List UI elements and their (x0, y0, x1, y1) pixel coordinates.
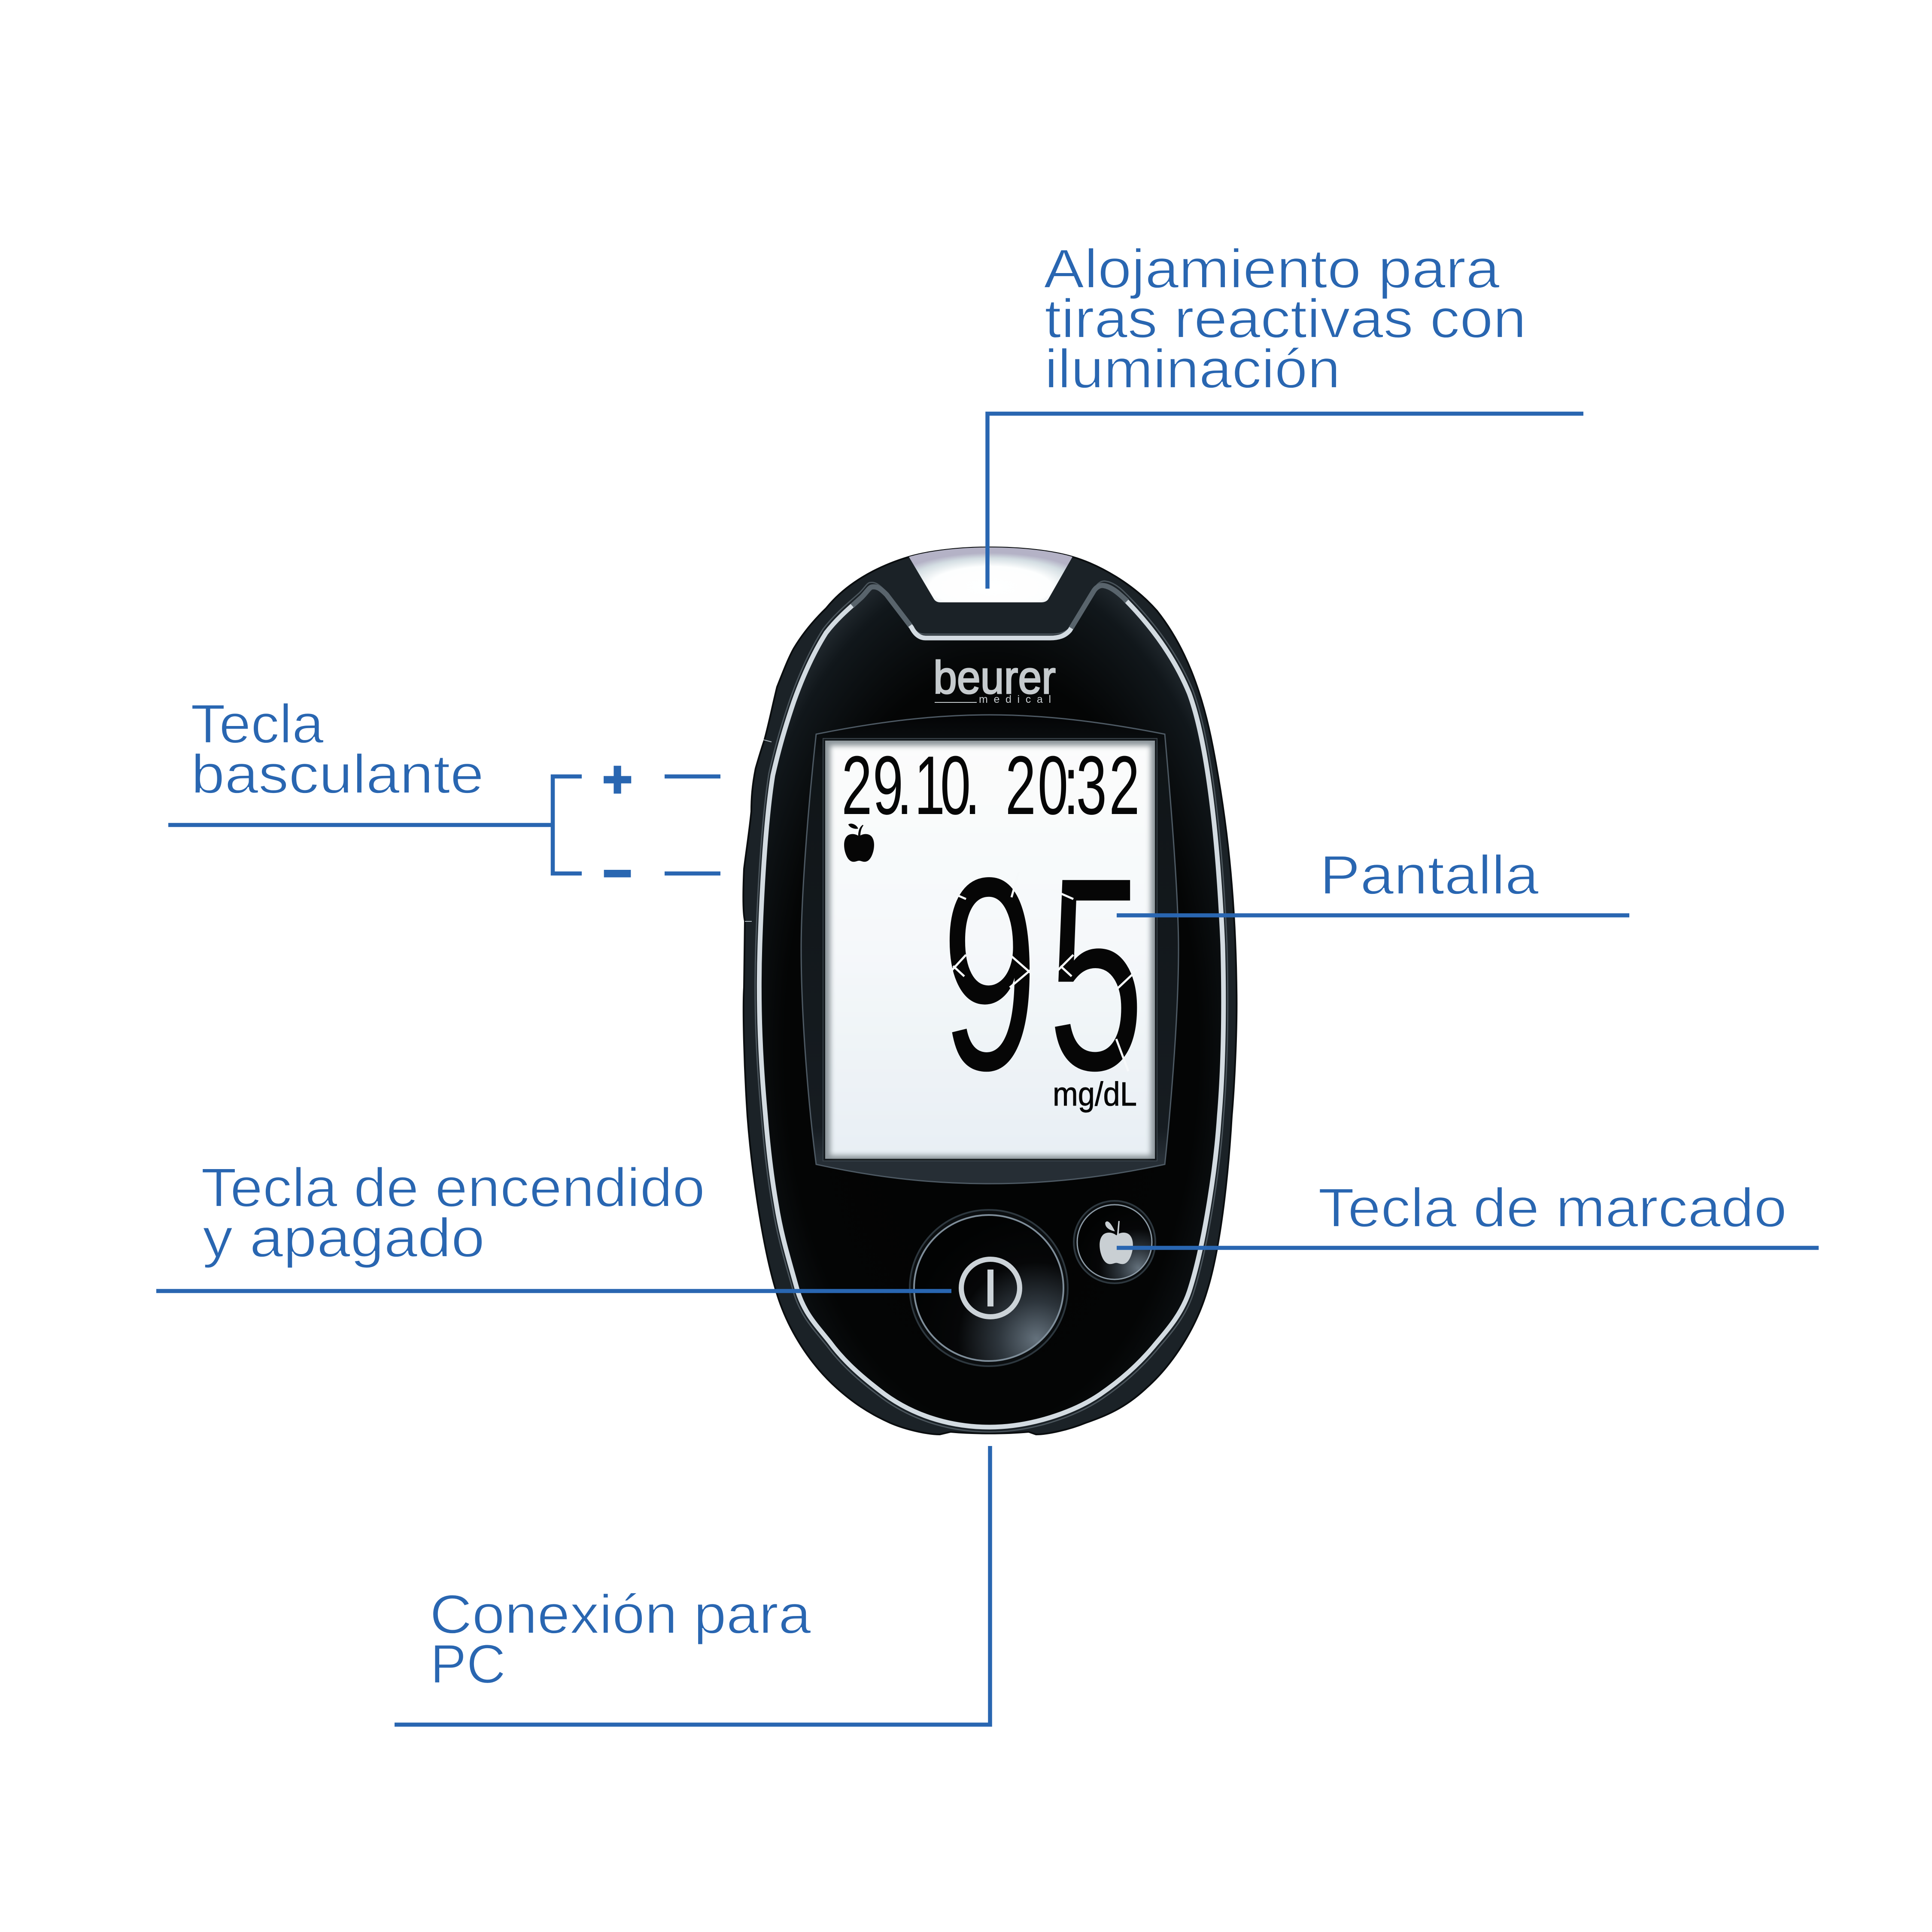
power symbol bar (987, 1270, 993, 1306)
leader bracket: rocker key (168, 776, 720, 873)
power symbol ring (961, 1259, 1020, 1317)
brand subtitle: medical (979, 693, 1051, 705)
device outer shell (743, 547, 1236, 1434)
leader line: power key (156, 1289, 951, 1293)
minus symbol: − (603, 846, 632, 901)
label: test strip slot: iluminación (1045, 338, 1340, 400)
leader line: PC connection (395, 1446, 990, 1725)
power button halo (910, 1210, 1068, 1366)
screen backlight (830, 746, 1151, 1155)
glucose meter device (743, 547, 1236, 1434)
marker button apple (1100, 1221, 1133, 1264)
marker button cap (1077, 1205, 1152, 1279)
side rocker joint marks (745, 740, 772, 921)
label: PC connection: Conexión para (430, 1584, 811, 1645)
glucose digit five: 5 (1048, 821, 1144, 1127)
brand logo (933, 651, 1056, 705)
brand name: beurer (933, 651, 1056, 703)
dimmed rim around notch peaks (852, 586, 1127, 628)
glucose digit nine: 9 (942, 821, 1038, 1127)
marker button (1074, 1201, 1155, 1283)
callout: rocker key (168, 693, 720, 901)
label: power key: Tecla de encendido (201, 1157, 705, 1218)
test strip slot with illumination (909, 547, 1072, 602)
logo underline (935, 702, 977, 703)
label: display: Pantalla (1320, 844, 1539, 906)
date and time reading: 29.10. 20:32 (841, 738, 1139, 832)
power button (910, 1210, 1068, 1366)
label: rocker key: Tecla (191, 693, 324, 755)
screen edge shading (825, 741, 1155, 1159)
label: power key: y apagado (203, 1207, 485, 1269)
screen bezel (801, 715, 1179, 1184)
label: marker key: Tecla de marcado (1318, 1177, 1787, 1239)
label: rocker key: basculante (191, 744, 484, 805)
power button cap (914, 1215, 1063, 1361)
leader line: marker key (1117, 1246, 1819, 1250)
plus symbol: + (602, 750, 632, 808)
label: test strip slot: tiras reactivas con (1045, 288, 1526, 349)
leader line: display (1117, 913, 1629, 917)
marker button halo (1074, 1201, 1155, 1283)
glucose value (942, 821, 1144, 1127)
callout: test strip slot (987, 238, 1583, 589)
meal marker apple (844, 823, 874, 862)
callout: PC connection (395, 1446, 990, 1725)
label: PC connection: PC (430, 1634, 506, 1695)
leader line: test strip slot (987, 414, 1583, 589)
screen frame (823, 738, 1157, 1161)
unit label: mg/dL (1053, 1075, 1137, 1113)
LCD screen (823, 738, 1157, 1161)
callout: power key (156, 1157, 951, 1291)
label: test strip slot: Alojamiento para (1044, 238, 1500, 300)
device face and bright rim (759, 586, 1224, 1427)
thin outer contour line (755, 581, 1228, 1432)
